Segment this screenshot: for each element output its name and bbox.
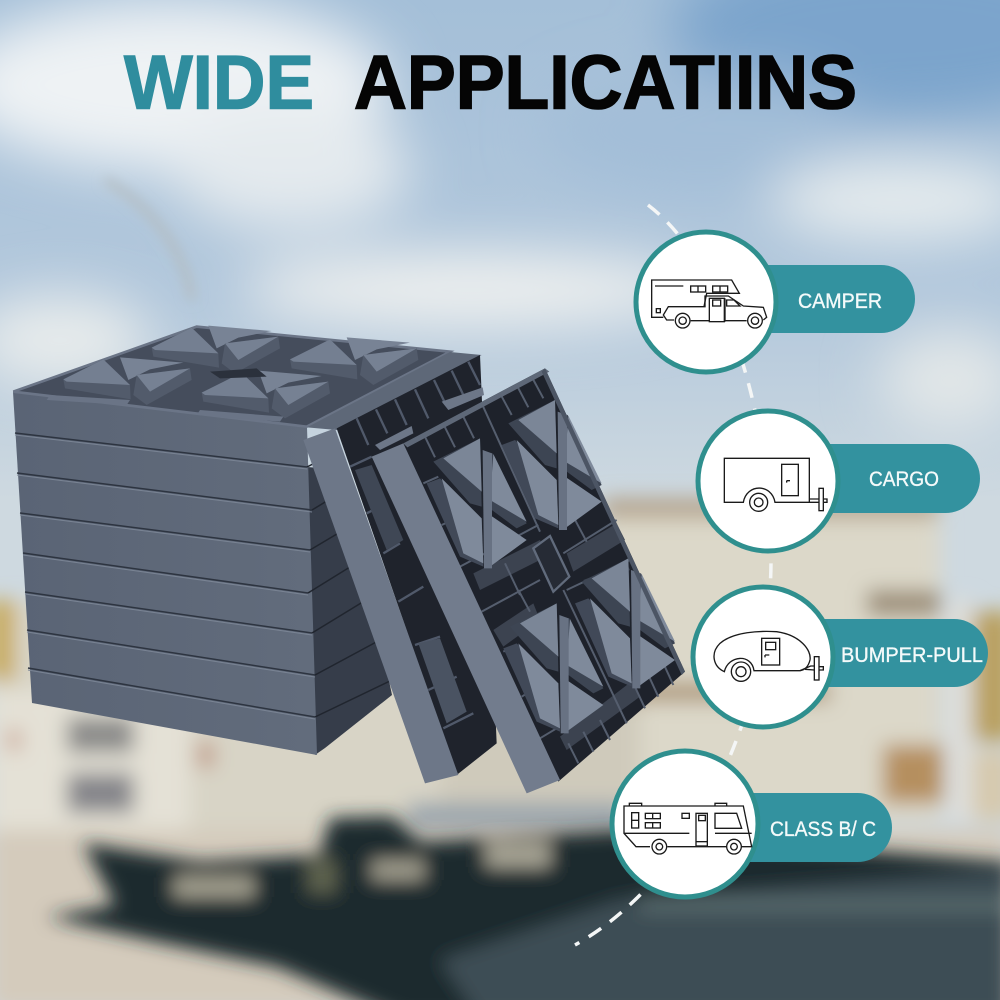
pill: cargo xyxy=(750,444,980,513)
circle: camper xyxy=(636,232,776,372)
stack front face xyxy=(13,392,317,755)
dashed connector arc xyxy=(575,205,771,945)
label: class b/c: CLASS B/ C xyxy=(770,817,876,841)
asphalt and undercarriage shadow xyxy=(47,816,1000,1000)
layer separators xyxy=(15,433,315,717)
title word: APPLICATIINS: APPLICATIINS xyxy=(354,40,857,126)
item: bumper-pull xyxy=(693,587,988,727)
stack right side xyxy=(307,467,392,755)
rear block xyxy=(303,352,497,783)
label: cargo: CARGO xyxy=(869,467,939,491)
item: cargo xyxy=(698,411,980,551)
pill: class b/c xyxy=(670,793,892,862)
label: camper: CAMPER xyxy=(798,289,882,313)
circle: cargo xyxy=(698,411,838,551)
stack side separators xyxy=(307,450,392,717)
icon: cargo trailer xyxy=(724,458,827,511)
pill: camper xyxy=(690,265,915,333)
triangle cluster 1 xyxy=(427,438,527,568)
pill: bumper-pull xyxy=(750,619,988,687)
label: bumper-pull: BUMPER-PULL xyxy=(841,643,983,667)
product: stack of leveling blocks xyxy=(13,326,450,755)
front block xyxy=(372,368,685,793)
icon: truck camper xyxy=(652,280,767,328)
product: leaning blocks xyxy=(303,352,685,793)
icon: teardrop trailer xyxy=(714,631,823,681)
circle: bumper-pull xyxy=(693,587,833,727)
title xyxy=(124,40,857,126)
title word: WIDE: WIDE xyxy=(124,40,314,126)
item: class b/c xyxy=(612,751,892,897)
rear block rail xyxy=(303,428,458,783)
center socket xyxy=(533,536,569,592)
front block rail xyxy=(372,443,560,793)
item: camper xyxy=(636,232,915,372)
circle: class b/c xyxy=(612,751,758,897)
stack top face with triangles xyxy=(13,326,450,427)
icon: motorhome xyxy=(624,803,752,854)
